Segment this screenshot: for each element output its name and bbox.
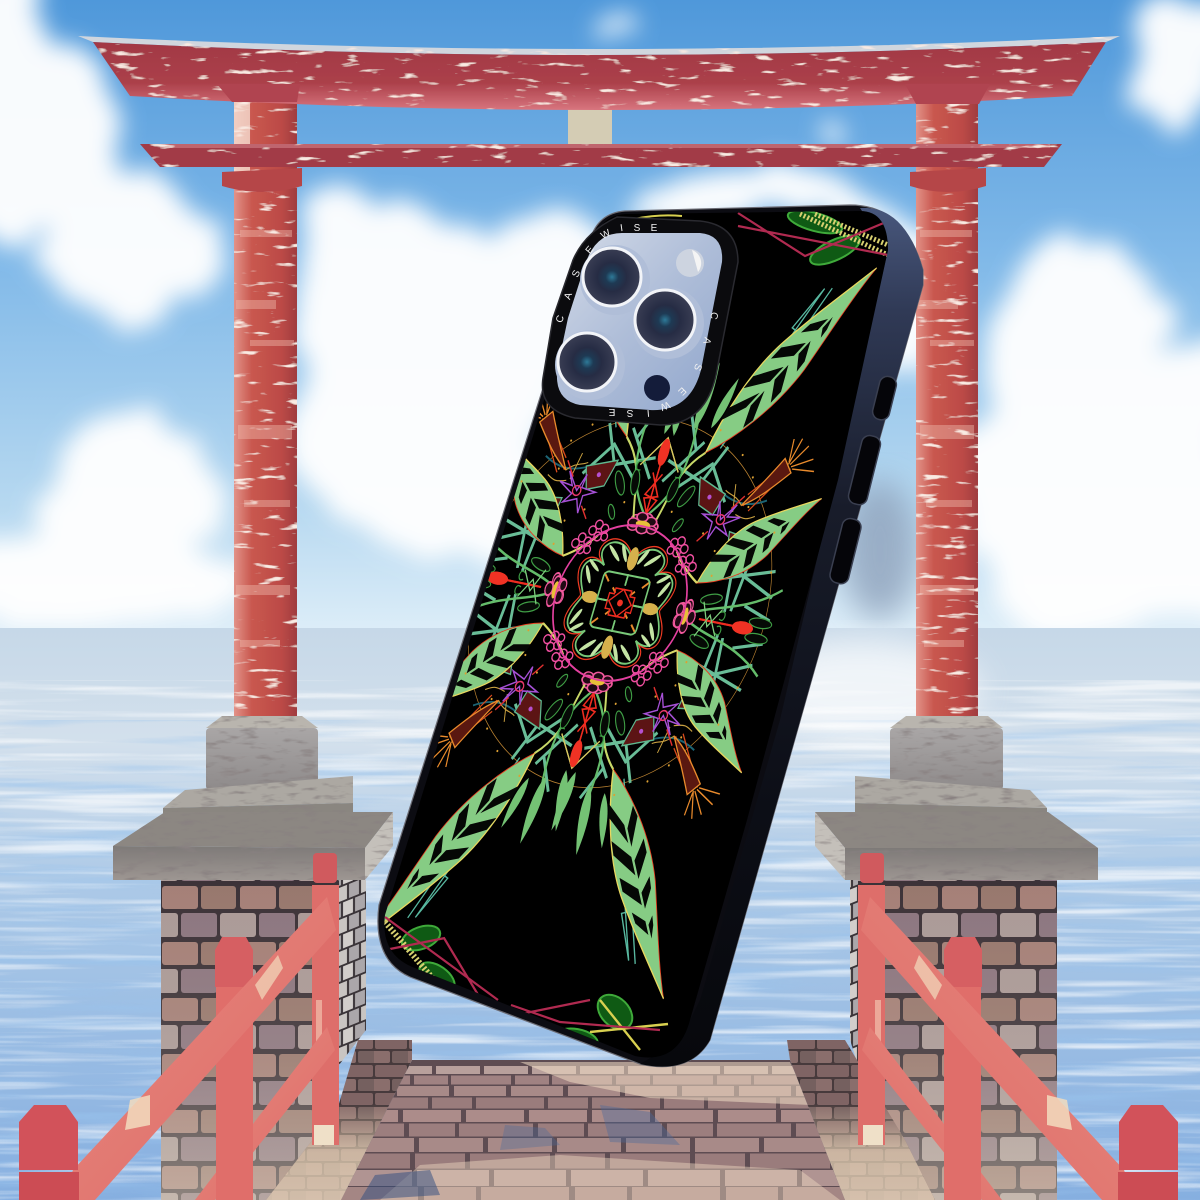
right stone base (815, 716, 1098, 880)
column caps (217, 84, 990, 104)
brand lettering: C (707, 311, 720, 320)
lower beam (140, 144, 1062, 167)
microphone dot (644, 375, 670, 401)
right railing (858, 853, 1178, 1200)
centre strut (568, 104, 612, 144)
left railing (19, 853, 339, 1200)
lens bottom (555, 330, 625, 400)
brand lettering (554, 223, 720, 418)
back post (312, 853, 339, 1145)
camera bumper (542, 217, 738, 425)
middle post (215, 937, 253, 1200)
left column (234, 100, 297, 718)
column collars (222, 168, 986, 192)
brand lettering: C (554, 314, 567, 324)
bottom centre corner art (510, 994, 668, 1051)
phone (337, 191, 923, 1067)
right brick pedestal (850, 880, 1057, 1200)
phone back (384, 211, 888, 1058)
camera module (542, 217, 738, 425)
brand lettering: A (700, 336, 713, 346)
lens right (632, 287, 704, 359)
brand lettering: E (608, 406, 615, 417)
brand lettering: E (651, 223, 658, 234)
lens top (580, 245, 650, 315)
brand lettering: W (599, 227, 613, 242)
brand lettering: S (634, 223, 641, 234)
flash (676, 249, 704, 277)
lower rail (195, 1027, 335, 1200)
brand lettering: S (570, 268, 583, 279)
brand lettering: I (620, 223, 624, 234)
artwork (384, 212, 888, 1051)
bridge floor (330, 1060, 860, 1200)
sky background (0, 0, 1200, 630)
front post cap (19, 1105, 79, 1200)
shaded cloud (842, 480, 918, 620)
clouds (0, 0, 1200, 630)
brand lettering: E (584, 244, 597, 256)
upper rail (62, 897, 336, 1200)
camera plate (557, 233, 722, 410)
water (0, 628, 1200, 1200)
brand lettering: S (626, 407, 633, 418)
brand lettering: I (646, 407, 650, 418)
right column (916, 100, 978, 718)
side buttons (828, 375, 898, 585)
left brick pedestal (161, 880, 366, 1200)
phone case body (378, 205, 923, 1067)
brand lettering: S (691, 362, 704, 372)
case side reflection (640, 208, 923, 1067)
left curb (266, 1040, 412, 1200)
brand lettering: E (675, 385, 688, 397)
bottom left corner art (385, 917, 498, 1003)
right curb (787, 1040, 935, 1200)
top right corner art (637, 212, 888, 266)
torii gate (78, 36, 1120, 718)
mandala (384, 267, 877, 1000)
brand lettering: W (658, 398, 671, 412)
brand lettering: A (562, 291, 575, 301)
left stone base (113, 716, 393, 880)
top beam (78, 36, 1120, 110)
